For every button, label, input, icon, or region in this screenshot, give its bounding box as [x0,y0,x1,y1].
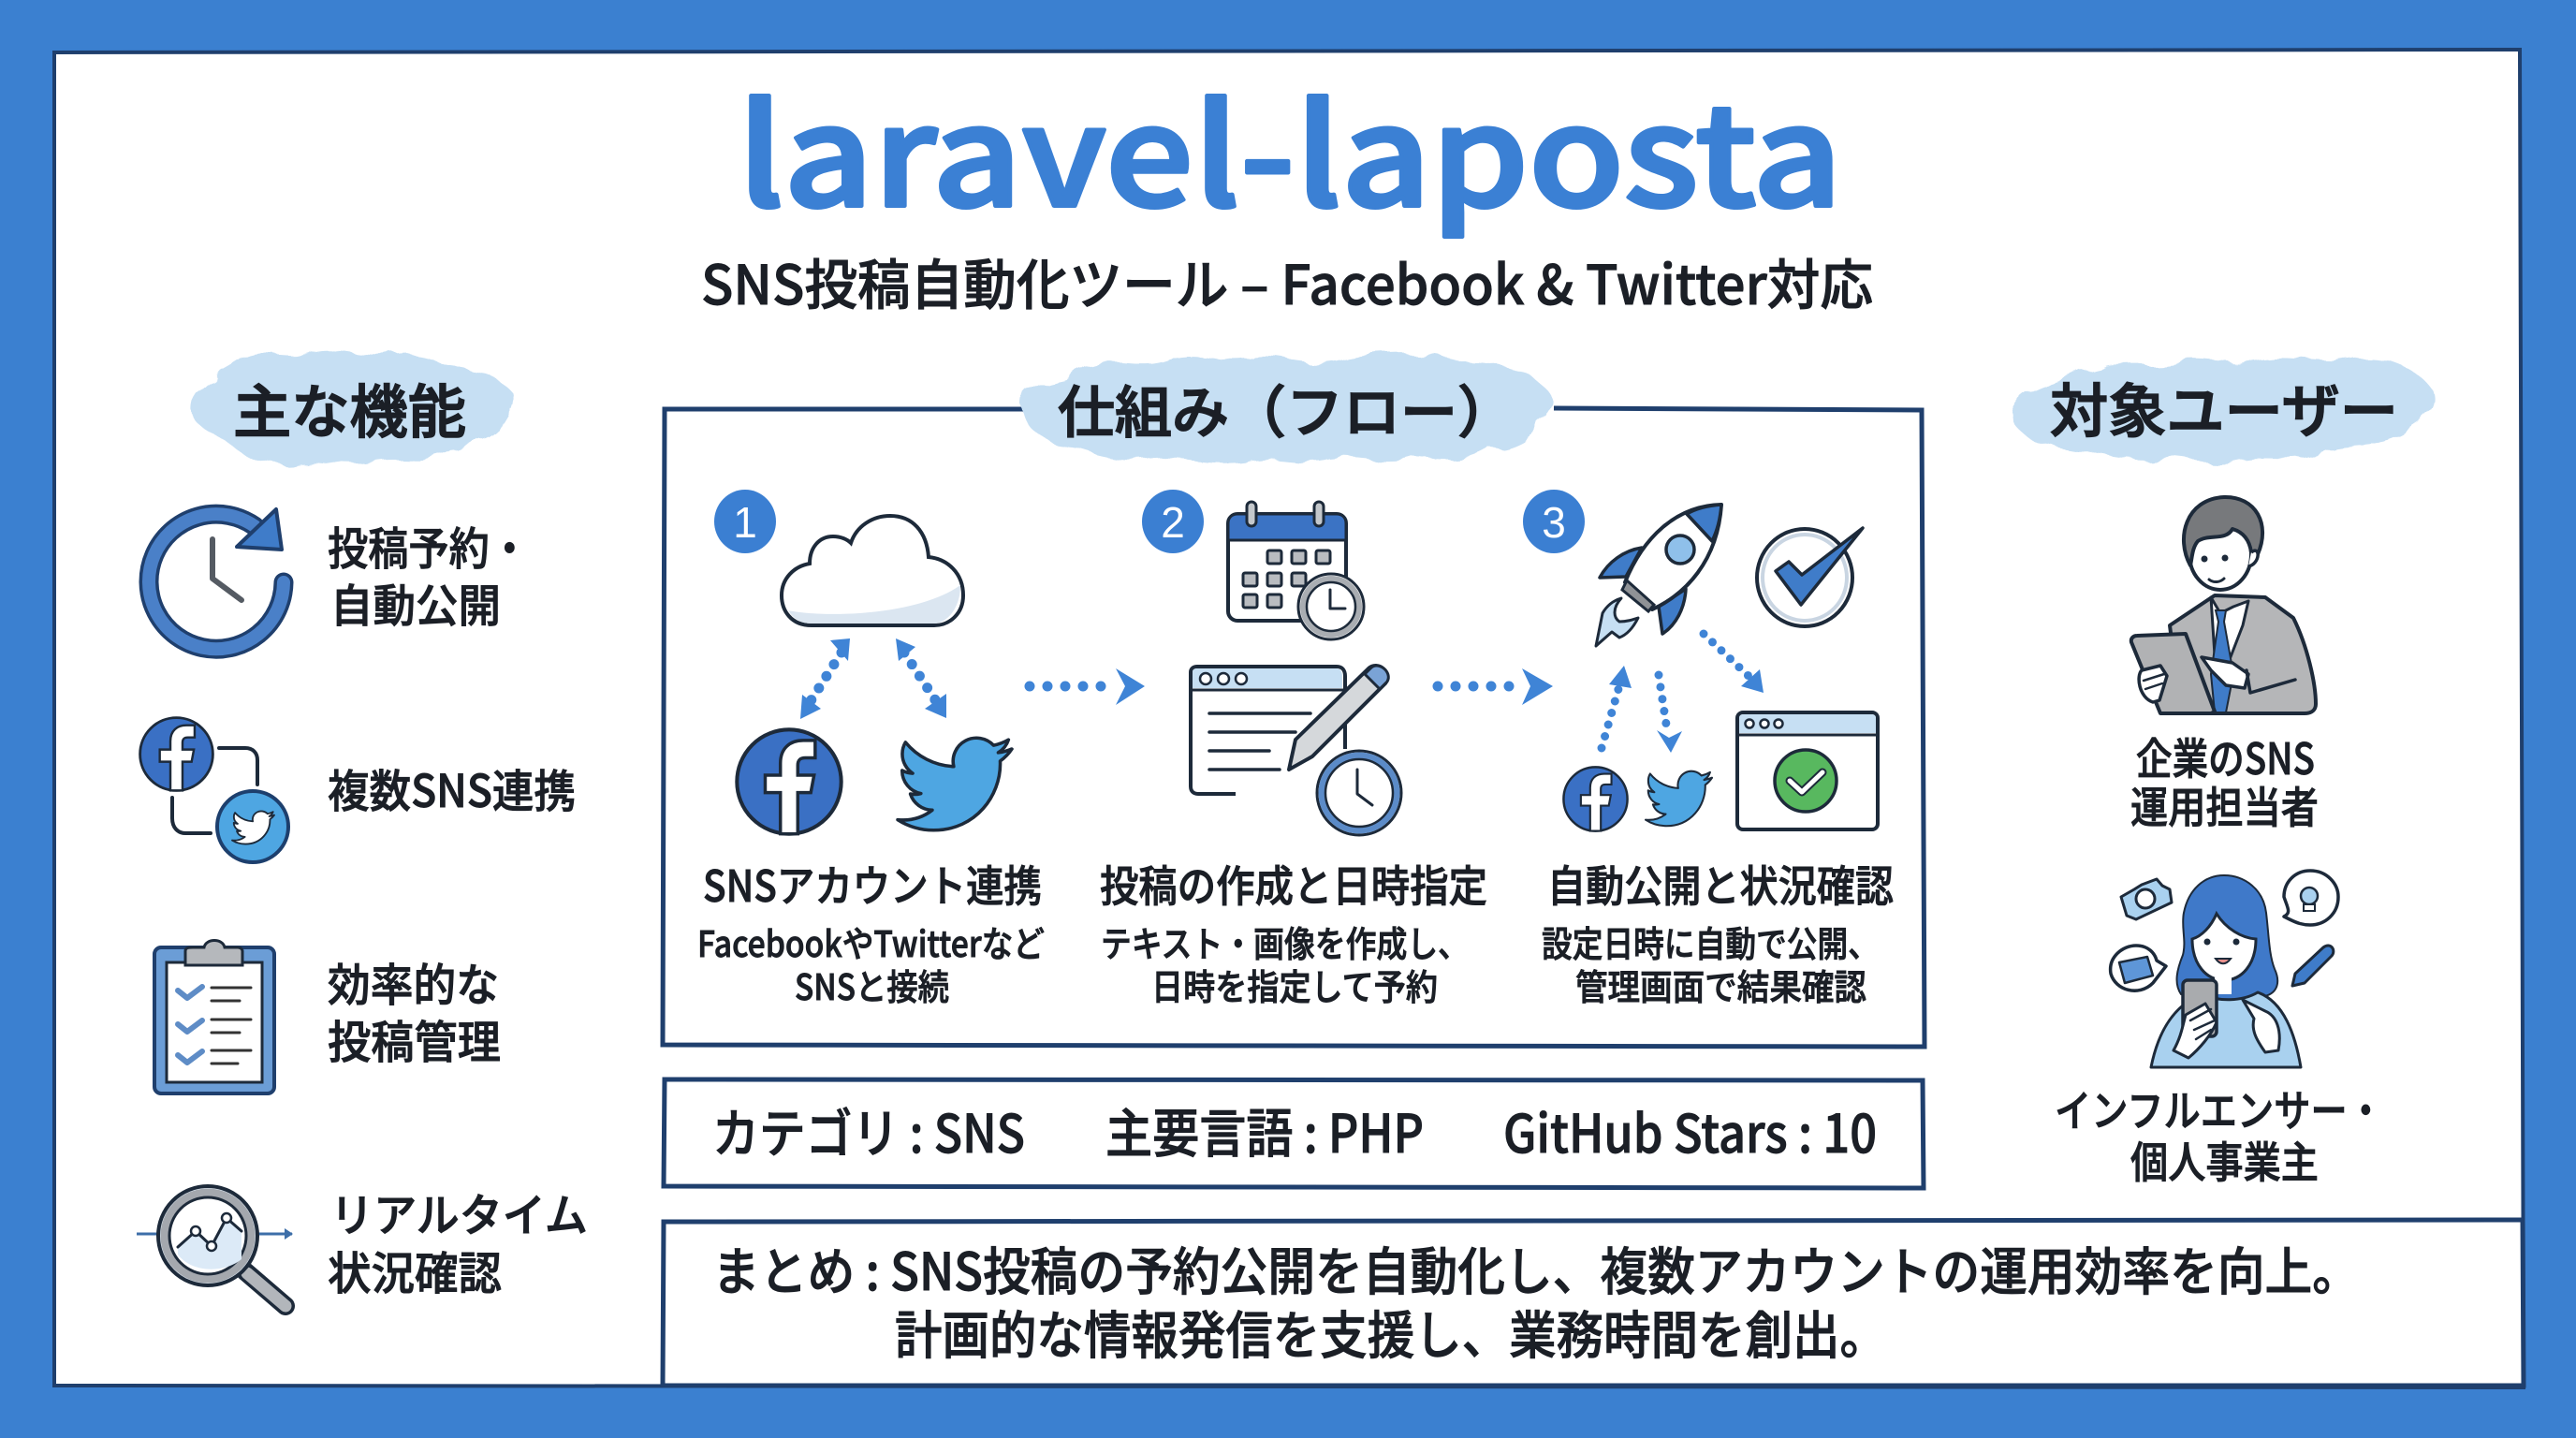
heading: step 1: SNSアカウント連携 [703,853,1042,915]
label: 状況確認 [328,1237,502,1302]
label [328,948,501,1071]
arrow: rocket to browser [1704,634,1764,693]
summary panel [663,1220,2524,1386]
arrow: Facebook to rocket [1602,666,1632,748]
badge 3 [1523,490,1585,553]
face [2192,914,2256,994]
arrow: step 1 to 2 [1030,668,1145,705]
icon: browser with green check [1737,712,1878,829]
label: company SNS manager [2130,726,2319,836]
feature: multi SNS [140,718,576,862]
icon: linked Facebook and Twitter [140,718,288,862]
label [328,1179,588,1302]
icon: cloud [782,516,963,625]
heading: target users: 対象ユーザー [2050,364,2398,448]
feature: realtime status [137,1179,588,1306]
text: step 1: FacebookやTwitterなど [697,916,1045,967]
icon: Twitter [898,738,1012,830]
main language: 主要言語 : PHP [1105,1093,1424,1168]
step 2 [1100,490,1487,1010]
feature: efficient management [154,940,501,1093]
body [2170,595,2316,713]
label: company SNS manager: 運用担当者 [2130,774,2319,836]
summary text: 計画的な情報発信を支援し、業務時間を創出。 [895,1294,1887,1369]
summary text: まとめ : SNS投稿の予約公開を自動化し、複数アカウントの運用効率を向上。 [712,1230,2360,1305]
panel: main features [137,351,588,1306]
arrow: step 2 to 3 [1438,668,1553,705]
category: カテゴリ : SNS [712,1093,1025,1168]
badge 3: 3 [1542,498,1566,547]
label: influencer: インフルエンサー・ [2055,1078,2384,1139]
heading: target users [2012,359,2436,463]
label [328,512,530,635]
hands [2139,657,2295,702]
text: step 3: 管理画面で結果確認 [1575,959,1866,1010]
summary text [712,1230,2360,1369]
heading: main features: 主な機能 [233,365,466,449]
title: laravel-laposta [738,45,1842,246]
label: influencer: 個人事業主 [2130,1129,2319,1191]
badge 2: 2 [1161,498,1185,547]
panel: flow [663,353,1925,1047]
arrow: cloud to Facebook [800,638,850,719]
hands [2174,1000,2279,1058]
arrow: rocket to Twitter [1657,675,1682,753]
label: company SNS manager: 企業のSNS [2136,726,2315,787]
tablet [2131,634,2215,713]
icon: editor with pencil and clock [1191,666,1401,835]
subtitle: SNS投稿自動化ツール – Facebook & Twitter対応 [701,242,1873,320]
heading: flow [1020,353,1554,462]
figure: influencer [2111,871,2338,1067]
icon: rocket [1596,505,1721,646]
GitHub stars: GitHub Stars : 10 [1503,1093,1877,1168]
icon: idea bubble [2284,871,2338,925]
badge 2 [1142,490,1204,553]
icon: clipboard [154,940,274,1093]
icon: check circle [1757,528,1863,626]
label: 複数SNS連携 [328,755,576,820]
text: step 2: 日時を指定して予約 [1151,959,1438,1010]
panel: target users [2012,359,2436,1191]
badge 1 [714,490,776,553]
icon: calendar with clock [1228,502,1364,639]
label: リアルタイム [330,1179,588,1244]
label: 効率的な [328,948,499,1014]
hair and face [2184,497,2262,590]
text: step 2 [1101,916,1469,1010]
text: step 1: SNSと接続 [795,959,949,1010]
label: 投稿予約・ [328,512,530,578]
heading: step 2: 投稿の作成と日時指定 [1100,853,1487,915]
phone [2183,980,2217,1036]
badge 1: 1 [733,498,757,547]
hair [2177,875,2277,1000]
heading: main features [191,351,514,464]
text: step 1 [697,916,1045,1010]
icon: magnifier with chart [137,1186,293,1306]
step 3 [1523,490,1894,1010]
body [2151,992,2301,1067]
icon: Facebook [737,729,842,834]
text: step 2: テキスト・画像を作成し、 [1101,916,1469,967]
flow frame [663,408,1925,1047]
heading: flow: 仕組み（フロー） [1058,368,1515,449]
heading: step 3: 自動公開と状況確認 [1547,853,1894,915]
info bar [664,1079,1924,1188]
figure: company SNS manager [2131,497,2316,713]
label: 自動公開 [330,569,501,635]
icon: pencil [2292,946,2334,986]
icon: clock with arrow [149,509,284,649]
label: influencer [2055,1078,2384,1191]
text: step 3: 設定日時に自動で公開、 [1542,916,1879,967]
arrow: cloud to Twitter [896,638,946,718]
icon: Twitter [1646,771,1712,826]
step 1 [697,490,1045,1010]
feature: scheduled posting [149,509,530,649]
icon: mail bubble [2111,946,2166,990]
icon: Facebook [1563,767,1628,831]
shirt and tie [2211,597,2248,712]
icon: camera [2121,879,2172,919]
text: step 3 [1542,916,1879,1010]
label: 投稿管理 [328,1005,501,1071]
